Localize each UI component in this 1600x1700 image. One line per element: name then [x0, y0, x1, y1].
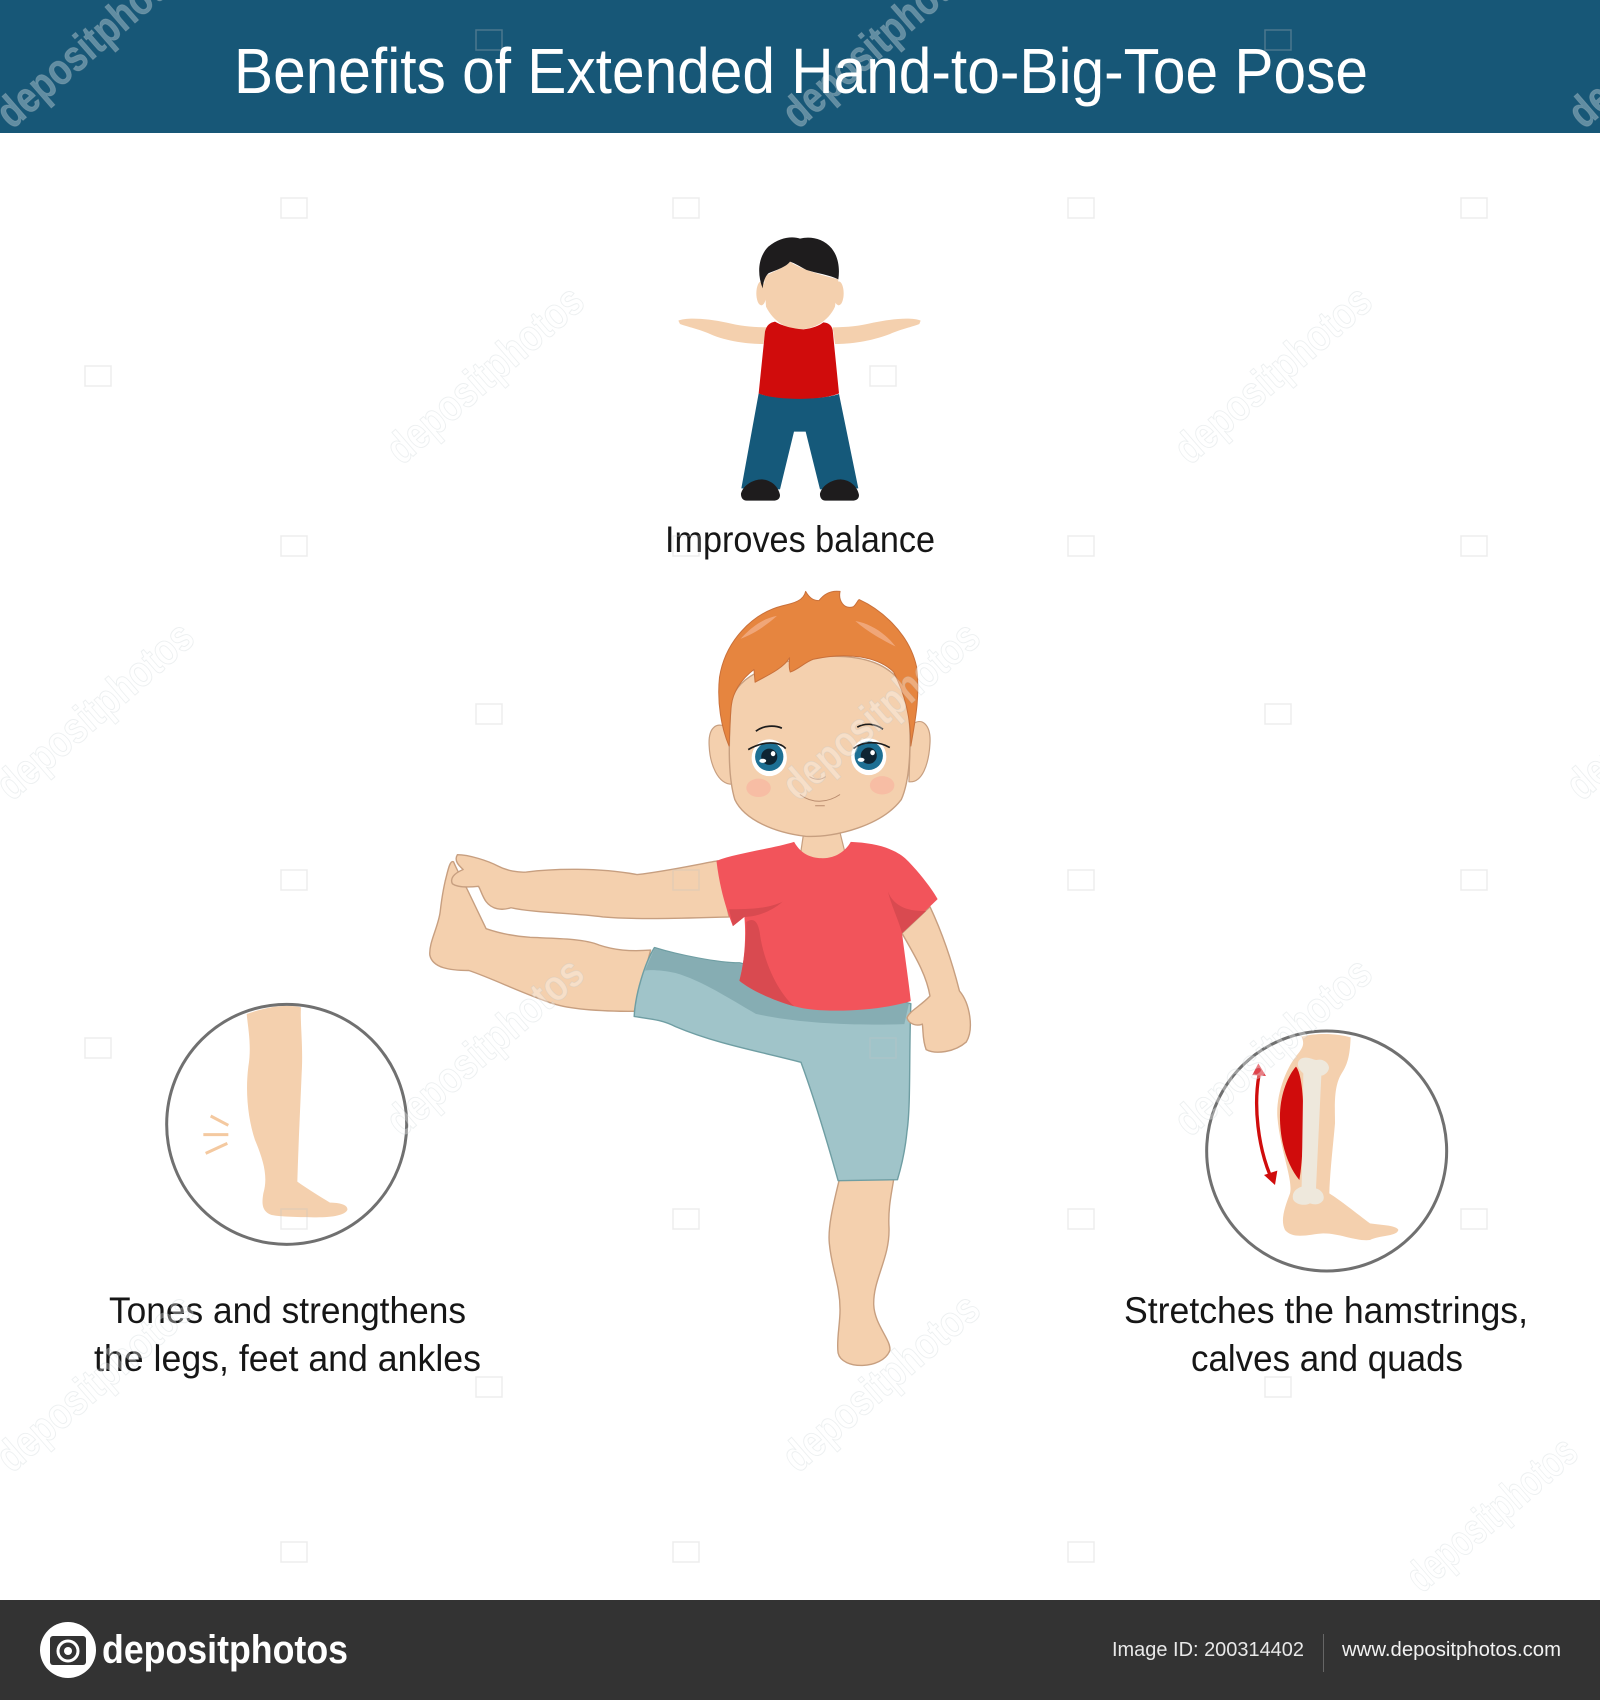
watermark text: depositphotos [376, 948, 593, 1146]
standing leg [829, 1180, 894, 1365]
raised leg and foot [430, 862, 651, 1011]
shorts [634, 948, 911, 1181]
main character: boy in pose [430, 591, 970, 1365]
logo icon [40, 1622, 96, 1678]
circle: legs and ankles [167, 1004, 407, 1244]
label: hamstrings, calves and quads: calves and quads [1191, 1338, 1463, 1379]
right ear [909, 722, 930, 782]
eye right [851, 738, 886, 775]
shorts shadow [645, 949, 909, 1025]
website: www.depositphotos.com [1341, 1639, 1561, 1661]
eyelashes and brows [748, 724, 890, 750]
logo wordmark: depositphotos [102, 1628, 348, 1672]
nose and mouth [800, 777, 840, 806]
watermark text: depositphotos [1164, 276, 1381, 474]
right arm and hand [902, 907, 970, 1052]
shirt [716, 842, 938, 1011]
circle: hamstrings, calves and quads [1207, 1031, 1447, 1271]
face [729, 656, 910, 836]
left arm holding toe [452, 855, 729, 919]
label: legs, feet and ankles: Tones and strengthens [109, 1290, 466, 1331]
watermark camera marks [85, 30, 1487, 1562]
eye left [752, 739, 787, 776]
label: hamstrings, calves and quads: Stretches the hamstrings, [1124, 1290, 1528, 1331]
label: legs, feet and ankles [94, 1290, 481, 1379]
shirt shadows [729, 891, 926, 1006]
hair [719, 591, 918, 746]
label: hamstrings, calves and quads [1124, 1290, 1528, 1379]
small figure: improves balance [678, 237, 921, 501]
cheeks [746, 776, 894, 797]
neck [798, 833, 850, 871]
label: legs, feet and ankles: the legs, feet and ankles [94, 1338, 481, 1379]
muscle [1280, 1067, 1303, 1180]
header band [0, 0, 1600, 133]
watermark text: depositphotos [772, 612, 989, 810]
left ear [709, 725, 732, 784]
watermark text: depositphotos [1164, 948, 1381, 1146]
hair highlights [741, 616, 896, 647]
label: improves balance: Improves balance [665, 519, 935, 560]
image id: Image ID: 200314402 [1112, 1639, 1304, 1661]
stretch arrow [1257, 1075, 1270, 1175]
bone [1293, 1058, 1329, 1205]
watermark text: depositphotos [376, 276, 593, 474]
watermark text: depositphotos [772, 1284, 989, 1482]
footer bar [0, 1600, 1600, 1700]
title: Benefits of Extended Hand-to-Big-Toe Pose [234, 35, 1368, 107]
